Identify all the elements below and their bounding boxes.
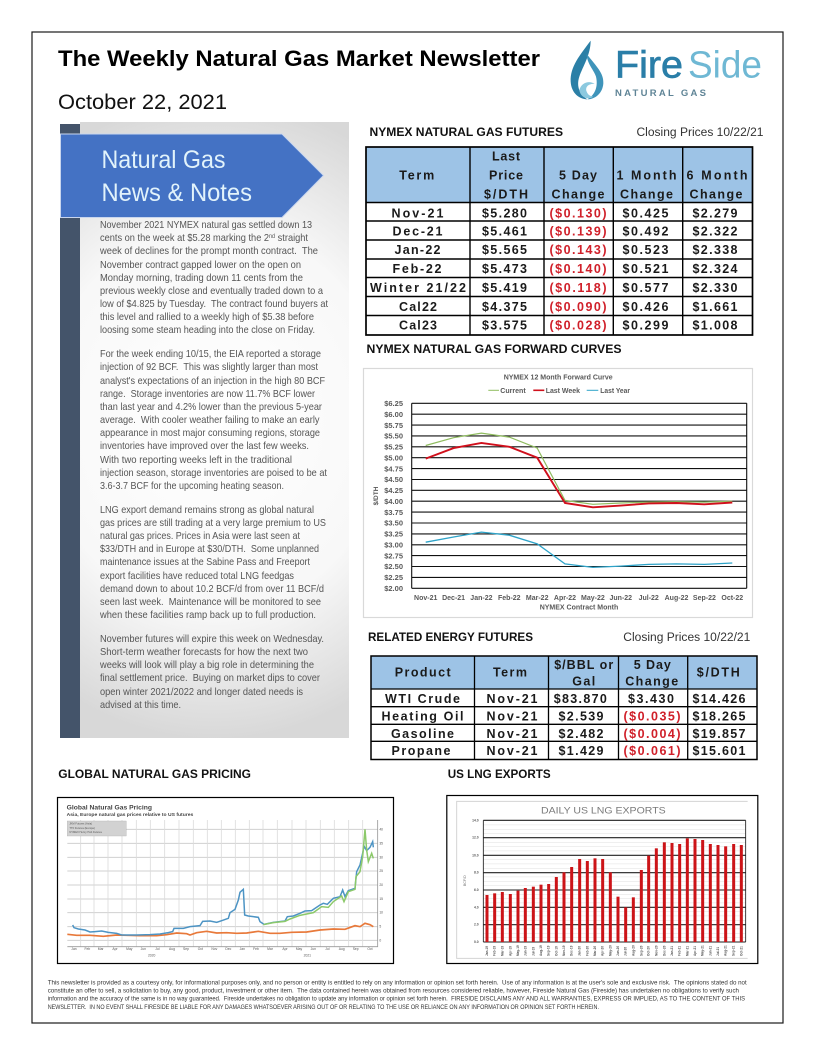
month labels: Sep-20 bbox=[639, 945, 643, 956]
chart: daily US LNG exports: DAILY US LNG EXPORTS bbox=[541, 805, 666, 815]
text block: paragraph 1: this level and rallied to a weekly high of $5.38 before bbox=[100, 312, 314, 323]
chart: global natural gas pricing: Asia, Europe natural gas prices relative to US futures bbox=[67, 812, 194, 817]
disclaimer footer: NEWSLETTER. IN NO EVENT SHALL FIRESIDE BE LIABLE FOR ANY DAMAGES WHATSOEVER ARISING OUT OF OR RELATING TO THE USE OR RELIANCE ON ANY INFORMATION OR OPINION SET FORTH HEREIN. bbox=[48, 1004, 599, 1011]
row: Dec-21: Dec-21 bbox=[392, 224, 443, 238]
row: Dec-21: $2.322 bbox=[692, 224, 738, 238]
table header: Gal bbox=[572, 674, 595, 688]
text block: paragraph 2: injection of 92 BCF. This was slightly larger than most bbox=[100, 362, 318, 373]
y axis labels: $3.25 bbox=[384, 530, 403, 539]
month labels: Sep-21 bbox=[732, 945, 736, 956]
text block: paragraph 1: November 2021 NYMEX natural gas settled down 13 bbox=[100, 220, 312, 231]
y axis title: $/DTH bbox=[373, 486, 380, 505]
y axis labels: $5.50 bbox=[384, 432, 403, 441]
row: Heating Oil: $18.265 bbox=[692, 709, 746, 723]
month labels: Jun-20 bbox=[616, 946, 620, 956]
text block: paragraph 1: loosing some steam heading into the close on Friday. bbox=[100, 325, 315, 336]
row: Cal22: $1.661 bbox=[692, 300, 738, 314]
y axis labels: $5.25 bbox=[384, 442, 403, 452]
month axis labels: 2020 bbox=[148, 954, 156, 958]
y axis labels bbox=[384, 399, 403, 593]
row: Heating Oil: Heating Oil bbox=[382, 709, 464, 723]
table header: 5 Day bbox=[559, 168, 597, 182]
row: WTI Crude: Nov-21 bbox=[486, 692, 538, 706]
series: US futures bbox=[67, 923, 373, 936]
row: Cal22: $0.426 bbox=[622, 300, 669, 314]
month axis labels: Jul bbox=[325, 947, 330, 951]
text block: paragraph 1: week of declines for the prompt month contract. The bbox=[99, 246, 318, 257]
line chart: NYMEX 12 month forward curve bbox=[364, 368, 752, 618]
bars bbox=[485, 838, 743, 942]
y axis labels: $6.00 bbox=[384, 410, 403, 419]
closing prices note: Closing Prices 10/22/21 bbox=[623, 632, 750, 644]
x axis labels: Feb-22 bbox=[498, 595, 521, 602]
month axis labels: May bbox=[126, 947, 133, 951]
month labels: Jan-20 bbox=[578, 946, 582, 956]
logo: FireSide Natural Gas bbox=[571, 41, 762, 99]
right axis labels: 30 bbox=[379, 855, 383, 859]
month axis labels: 2021 bbox=[304, 954, 311, 958]
row: Gasoline: Nov-21 bbox=[486, 727, 538, 741]
series: Europe bbox=[263, 829, 373, 925]
row: Jan-22: $0.523 bbox=[622, 243, 669, 257]
row: Cal22 bbox=[399, 300, 738, 314]
row: Winter 21/22: $2.330 bbox=[692, 281, 738, 295]
chart legend bbox=[488, 388, 630, 395]
x axis labels: Mar-22 bbox=[526, 595, 549, 602]
x axis labels: Aug-22 bbox=[665, 595, 688, 602]
heading: US LNG exports: US LNG EXPORTS bbox=[448, 767, 551, 781]
x axis labels: Dec-21 bbox=[442, 595, 465, 602]
row: Dec-21: ($0.139) bbox=[550, 224, 606, 238]
series: current bbox=[426, 433, 732, 504]
table header bbox=[395, 658, 740, 688]
logo: FireSide Natural Gas: NATURAL GAS bbox=[615, 88, 706, 99]
series: Asia bbox=[73, 842, 373, 935]
table header: 1 Month bbox=[616, 168, 676, 182]
row: Cal23 bbox=[399, 318, 738, 332]
text block: paragraph 4: Short-term weather forecasts for how the next two bbox=[100, 647, 308, 658]
chart legend: Last Week bbox=[546, 388, 580, 395]
row: Feb-22: $0.521 bbox=[622, 262, 669, 276]
panel: news and notes bbox=[60, 122, 349, 738]
row: Nov-21: Nov-21 bbox=[392, 206, 444, 220]
y axis labels: $2.25 bbox=[384, 573, 403, 582]
text block: paragraph 3: $33/DTH and in Europe at $30/DTH. Some unplanned bbox=[100, 544, 319, 555]
text block: paragraph 2 bbox=[100, 349, 327, 492]
row: Heating Oil bbox=[382, 709, 746, 723]
y axis labels: 12.0 bbox=[472, 836, 479, 840]
text block: paragraph 4: advised at this time. bbox=[100, 700, 181, 711]
logo: FireSide Natural Gas: Side bbox=[688, 44, 762, 86]
row: Jan-22: $2.338 bbox=[692, 243, 738, 257]
disclaimer footer: This newsletter is provided as a courtesy only, for informational purposes only, and no person or entity is entitled to rely on any information or opinion set forth herein. Use of any information is at the user's sole and exclusive risk. The opinions stated do not bbox=[48, 980, 747, 986]
row: WTI Crude bbox=[385, 692, 746, 706]
month axis labels: Jun bbox=[141, 947, 146, 951]
row: Propane: Nov-21 bbox=[486, 744, 538, 758]
y axis labels: $3.00 bbox=[384, 540, 403, 550]
month labels: Jun-21 bbox=[708, 946, 712, 956]
month labels: Aug-21 bbox=[724, 945, 728, 956]
row: Nov-21: $2.279 bbox=[692, 206, 738, 220]
table header: Change bbox=[690, 188, 743, 202]
row: Jan-22: $5.565 bbox=[482, 243, 527, 257]
icon: flame bbox=[571, 41, 603, 99]
month axis labels: Jul bbox=[155, 947, 160, 951]
x axis labels: Sep-22 bbox=[693, 595, 716, 602]
table header: 5 Day bbox=[634, 658, 671, 672]
right axis labels: 10 bbox=[379, 911, 383, 915]
chart legend: TTF Futures (Europe) bbox=[69, 826, 95, 830]
row: Heating Oil: $2.539 bbox=[558, 709, 604, 723]
table header: Term bbox=[399, 168, 434, 182]
date: October 22, 2021 bbox=[58, 91, 227, 114]
month axis labels: Sep bbox=[353, 947, 359, 951]
x axis title: NYMEX Contract Month bbox=[540, 604, 618, 612]
text block: paragraph 1: cents on the week at $5.28 marking the 2 bbox=[100, 233, 286, 244]
month labels: Jul-20 bbox=[624, 947, 628, 956]
text block: paragraph 2: analyst's expectations of an injection in the high 80 BCF bbox=[100, 376, 325, 387]
text block: paragraph 4: final settlement price. Buying on market dips to cover bbox=[100, 673, 321, 684]
text block: paragraph 4: weeks will look will play a big role in determining the bbox=[99, 660, 314, 671]
disclaimer footer: information and the accuracy of the same is in no way guaranteed. Fireside undertakes no obligation to update any information or opinion set forth herein. FIRESIDE DISCLAIMS ANY AND ALL WARRANTIES, EXPRESS OR IMPLIED, AS TO THE CONTENT OF THIS bbox=[48, 996, 745, 1002]
row: Cal23: ($0.028) bbox=[550, 318, 606, 332]
month labels: Oct-19 bbox=[554, 946, 558, 956]
row: Gasoline: Gasoline bbox=[391, 727, 454, 741]
y axis title: BCF/D bbox=[463, 875, 467, 886]
row: Gasoline: $19.857 bbox=[692, 727, 746, 741]
row: Cal23: $1.008 bbox=[692, 318, 738, 332]
text block: paragraph 3: seen last week. Maintenance will be monitored to see bbox=[100, 597, 321, 608]
y axis labels: 2.0 bbox=[474, 923, 479, 927]
title: The Weekly Natural Gas Market Newsletter bbox=[58, 46, 540, 71]
month axis labels: Feb bbox=[253, 947, 259, 951]
row: Dec-21: $0.492 bbox=[622, 224, 669, 238]
row: Feb-22 bbox=[392, 262, 738, 276]
heading arrow: Natural Gas News & Notes bbox=[60, 134, 324, 218]
table header: Change bbox=[552, 188, 605, 202]
month labels: Oct-21 bbox=[739, 946, 743, 956]
month labels: Aug-19 bbox=[539, 945, 543, 956]
chart legend: Last Year bbox=[600, 388, 630, 395]
table header: $/DTH bbox=[697, 666, 740, 680]
chart legend bbox=[67, 821, 126, 836]
row: Jan-22 bbox=[394, 243, 738, 257]
month labels: Sep-19 bbox=[547, 945, 551, 956]
text block: paragraph 3 bbox=[99, 505, 326, 621]
x axis labels: Oct-22 bbox=[721, 595, 743, 602]
month axis labels: Mar bbox=[267, 947, 274, 951]
y axis labels: 6.0 bbox=[474, 888, 479, 892]
table: related energy futures bbox=[371, 656, 757, 760]
text block: paragraph 3: natural gas prices. Prices in Asia were last seen at bbox=[100, 531, 300, 542]
month labels bbox=[485, 945, 743, 956]
text block: paragraph 3: gas prices are still trading at a very large premium to US bbox=[100, 518, 326, 529]
row: Feb-22: $5.473 bbox=[482, 262, 527, 276]
month axis labels: May bbox=[296, 947, 302, 951]
text block: paragraph 1: low of $4.825 by Tuesday. The contract found buyers at bbox=[100, 299, 328, 310]
month labels: Apr-21 bbox=[693, 946, 697, 956]
row: Jan-22: Jan-22 bbox=[394, 243, 441, 257]
x axis labels bbox=[414, 595, 743, 602]
heading arrow: Natural Gas News & Notes: News & Notes bbox=[102, 179, 252, 207]
month labels: Jan-21 bbox=[670, 946, 674, 956]
text block: paragraph 4: open winter 2021/2022 and longer dated needs is bbox=[100, 687, 303, 698]
row: Nov-21: $5.280 bbox=[482, 206, 527, 220]
row: Propane: $1.429 bbox=[558, 744, 604, 758]
table header: Price bbox=[489, 168, 523, 182]
y axis labels: $2.75 bbox=[384, 551, 403, 560]
month axis labels: Aug bbox=[169, 947, 175, 951]
month labels: Mar-21 bbox=[685, 946, 689, 956]
y axis labels: $5.75 bbox=[384, 421, 403, 430]
right axis labels bbox=[379, 827, 383, 942]
x axis labels: Jan-22 bbox=[470, 595, 493, 602]
row: Propane bbox=[392, 744, 746, 758]
table header: Last bbox=[492, 150, 521, 164]
y axis labels bbox=[472, 818, 479, 944]
table header: $/DTH bbox=[484, 188, 528, 202]
row: WTI Crude: $83.870 bbox=[554, 692, 607, 706]
y axis labels: $4.25 bbox=[384, 486, 403, 495]
row: Propane: ($0.061) bbox=[624, 744, 680, 758]
text block: paragraph 1: previous weekly close and eventually traded down to a bbox=[100, 286, 323, 297]
row: Cal23: $3.575 bbox=[482, 318, 527, 332]
month labels: May-20 bbox=[608, 945, 612, 956]
row: Gasoline: ($0.004) bbox=[624, 727, 680, 741]
y axis labels: 0.0 bbox=[474, 940, 479, 944]
text block: paragraph 2: range. Storage inventories are now 11.7% BCF lower bbox=[100, 389, 316, 400]
month axis labels: Mar bbox=[98, 947, 104, 951]
month axis labels: Oct bbox=[367, 947, 373, 951]
y axis labels: $2.00 bbox=[384, 584, 403, 593]
text block: paragraph 2: For the week ending 10/15, the EIA reported a storage bbox=[100, 349, 321, 360]
text block: paragraph 1: straight bbox=[275, 233, 308, 244]
row: Nov-21 bbox=[392, 206, 738, 220]
x axis labels: Apr-22 bbox=[554, 595, 576, 602]
text block: paragraph 2: inventories have improved over the last few weeks. bbox=[100, 441, 309, 452]
month axis labels: Aug bbox=[339, 947, 345, 951]
month axis labels bbox=[71, 947, 373, 958]
month axis labels: Apr bbox=[112, 947, 118, 951]
right axis labels: 25 bbox=[379, 869, 383, 873]
text block: paragraph 4 bbox=[99, 634, 324, 711]
text block: paragraph 4: November futures will expire this week on Wednesday. bbox=[100, 634, 324, 645]
disclaimer footer bbox=[48, 980, 747, 1011]
text block: paragraph 2: than last year and 4.2% lower than the previous 5-year bbox=[100, 402, 323, 413]
row: Feb-22: Feb-22 bbox=[392, 262, 442, 276]
text block: paragraph 3: export facilities have reduced total LNG feedgas bbox=[100, 571, 294, 582]
row: Winter 21/22: Winter 21/22 bbox=[370, 281, 466, 295]
month labels: Nov-19 bbox=[562, 945, 566, 956]
month axis labels: Sep bbox=[183, 947, 189, 951]
month labels: May-21 bbox=[701, 945, 705, 956]
month axis labels: Oct bbox=[198, 947, 203, 951]
y axis labels: 10.0 bbox=[472, 853, 479, 857]
x axis labels: Jun-22 bbox=[610, 595, 632, 602]
y axis labels: 8.0 bbox=[474, 871, 479, 875]
month labels: Apr-19 bbox=[508, 946, 512, 956]
month labels: Feb-20 bbox=[585, 946, 589, 956]
chart legend: JKM Futures (Asia) bbox=[69, 822, 92, 826]
row: Gasoline bbox=[391, 727, 746, 741]
month labels: Dec-20 bbox=[662, 945, 666, 956]
y axis labels: 4.0 bbox=[474, 905, 479, 909]
month labels: Jul-21 bbox=[716, 947, 720, 956]
y axis labels: $2.50 bbox=[384, 562, 403, 571]
month axis labels: Feb bbox=[84, 947, 90, 951]
row: Cal23: $0.299 bbox=[622, 318, 669, 332]
row: Jan-22: ($0.143) bbox=[550, 243, 606, 257]
heading: NYMEX natural gas futures: NYMEX NATURAL GAS FUTURES bbox=[370, 125, 563, 139]
row: WTI Crude: WTI Crude bbox=[385, 692, 460, 706]
chart: global natural gas pricing: Global Natural Gas Pricing bbox=[67, 804, 152, 811]
y axis labels: $4.75 bbox=[384, 464, 403, 473]
month labels: Nov-20 bbox=[654, 945, 658, 956]
series: last year bbox=[426, 532, 732, 567]
row: WTI Crude: $3.430 bbox=[628, 692, 674, 706]
row: Propane: $15.601 bbox=[692, 744, 746, 758]
right axis labels: 15 bbox=[379, 897, 383, 901]
month axis labels: Jan bbox=[240, 947, 245, 951]
text block: paragraph 3: demand down to about 10.2 BCF/d from over 11 BCF/d bbox=[100, 584, 324, 595]
y axis labels: $3.75 bbox=[384, 508, 403, 517]
text block: paragraph 2: With two reporting weeks left in the traditional bbox=[100, 455, 292, 466]
row: Cal23: Cal23 bbox=[399, 318, 437, 332]
month labels: Mar-20 bbox=[593, 946, 597, 956]
table header bbox=[399, 150, 748, 202]
row: Cal22: $4.375 bbox=[482, 300, 527, 314]
month axis labels: Jan bbox=[71, 947, 77, 951]
heading: global natural gas pricing: GLOBAL NATURAL GAS PRICING bbox=[58, 767, 251, 781]
heading: related energy futures: RELATED ENERGY FUTURES bbox=[368, 630, 533, 644]
month labels: Jun-19 bbox=[523, 946, 527, 956]
text block: paragraph 1: nd bbox=[269, 234, 275, 240]
table header: Term bbox=[493, 666, 527, 680]
right axis labels: 0 bbox=[379, 938, 381, 942]
row: Feb-22: $2.324 bbox=[692, 262, 738, 276]
month labels: Apr-20 bbox=[601, 946, 605, 956]
y axis labels: 14.0 bbox=[472, 818, 479, 822]
right axis labels: 20 bbox=[379, 883, 383, 887]
row: Winter 21/22: ($0.118) bbox=[550, 281, 606, 295]
table header: Change bbox=[620, 188, 673, 202]
month axis labels: Nov bbox=[211, 947, 218, 951]
y axis labels: $4.00 bbox=[384, 497, 403, 506]
closing prices note: Closing Prices 10/22/21 bbox=[636, 127, 764, 139]
x axis labels: Nov-21 bbox=[414, 595, 437, 602]
table header: Change bbox=[625, 674, 678, 688]
x axis labels: Jul-22 bbox=[639, 595, 659, 602]
line chart: NYMEX 12 month forward curve: NYMEX 12 Month Forward Curve bbox=[504, 374, 613, 382]
row: WTI Crude: $14.426 bbox=[692, 692, 746, 706]
heading: forward curves: NYMEX NATURAL GAS FORWARD CURVES bbox=[366, 342, 622, 356]
text block: paragraph 3: when these facilities ramp back up to full production. bbox=[99, 610, 316, 621]
text block: paragraph 3: LNG export demand remains strong as global natural bbox=[100, 505, 314, 516]
row: Cal22: Cal22 bbox=[399, 300, 437, 314]
text block: paragraph 2: 3.6-3.7 BCF for the upcoming heating season. bbox=[100, 481, 284, 492]
row: Winter 21/22: $5.419 bbox=[482, 281, 527, 295]
y axis labels: $3.50 bbox=[384, 519, 403, 528]
y axis labels: $4.50 bbox=[384, 475, 403, 484]
month labels: Mar-19 bbox=[500, 946, 504, 956]
wordmark: Fire bbox=[615, 44, 683, 86]
right axis labels: 35 bbox=[379, 841, 383, 845]
text block: paragraph 2: injection season, storage inventories are poised to be at bbox=[100, 468, 327, 479]
month axis labels: Jun bbox=[311, 947, 316, 951]
row: Winter 21/22 bbox=[370, 281, 738, 295]
month labels: Dec-19 bbox=[570, 945, 574, 956]
text block: paragraph 2: appearance in most major consuming regions, storage bbox=[100, 428, 320, 439]
table header: 6 Month bbox=[686, 168, 748, 182]
chart: global natural gas pricing bbox=[58, 798, 394, 964]
table header: Product bbox=[395, 666, 452, 680]
chart legend: NYMEX Henry Hub Futures bbox=[69, 830, 103, 834]
x axis labels: May-22 bbox=[581, 595, 605, 602]
right axis labels: 40 bbox=[379, 827, 383, 831]
month labels: Oct-20 bbox=[647, 946, 651, 956]
row: Gasoline: $2.482 bbox=[558, 727, 604, 741]
chart: daily US LNG exports bbox=[447, 796, 758, 964]
month labels: Feb-19 bbox=[493, 946, 497, 956]
row: Dec-21: $5.461 bbox=[482, 224, 527, 238]
table: NYMEX futures bbox=[366, 147, 752, 335]
text block: paragraph 1: Monday morning, trading down 11 cents from the bbox=[100, 273, 303, 284]
row: Dec-21 bbox=[392, 224, 738, 238]
month labels: Jul-19 bbox=[531, 947, 535, 956]
month labels: Aug-20 bbox=[631, 945, 635, 956]
row: Propane: Propane bbox=[392, 744, 451, 758]
month labels: Jan-19 bbox=[485, 946, 489, 956]
month axis labels: Apr bbox=[282, 947, 288, 951]
month labels: May-19 bbox=[516, 945, 520, 956]
heading arrow: Natural Gas News & Notes: Natural Gas bbox=[102, 146, 226, 174]
row: Cal22: ($0.090) bbox=[550, 300, 606, 314]
text block: paragraph 2: average. With cooler weather failing to make an early bbox=[100, 415, 320, 426]
y axis labels: $6.25 bbox=[384, 399, 403, 408]
text block: paragraph 3: maintenance issues at the Sabine Pass and Freeport bbox=[100, 557, 310, 568]
chart legend: Current bbox=[500, 388, 526, 395]
row: Nov-21: $0.425 bbox=[622, 206, 669, 220]
month axis labels: Dec bbox=[225, 947, 232, 951]
row: Nov-21: ($0.130) bbox=[550, 206, 606, 220]
row: Heating Oil: Nov-21 bbox=[486, 709, 538, 723]
row: Heating Oil: ($0.035) bbox=[624, 709, 680, 723]
table header: $/BBL or bbox=[554, 658, 613, 672]
row: Feb-22: ($0.140) bbox=[550, 262, 606, 276]
series: last week bbox=[426, 443, 732, 507]
disclaimer footer: constitute an offer to sell, a solicitation to buy, any good, product, investment or other item. The data contained herein was obtained from resources considered reliable, however, Fireside Natural Gas (Fireside) has undertaken no obligations to verify such bbox=[48, 988, 739, 994]
text block: paragraph 1 bbox=[99, 220, 328, 336]
right axis labels: 5 bbox=[379, 925, 381, 929]
row: Winter 21/22: $0.577 bbox=[622, 281, 669, 295]
text block: paragraph 1: November contract gapped lower on the open on bbox=[100, 260, 301, 271]
y axis labels: $5.00 bbox=[384, 453, 403, 462]
month labels: Feb-21 bbox=[678, 946, 682, 956]
